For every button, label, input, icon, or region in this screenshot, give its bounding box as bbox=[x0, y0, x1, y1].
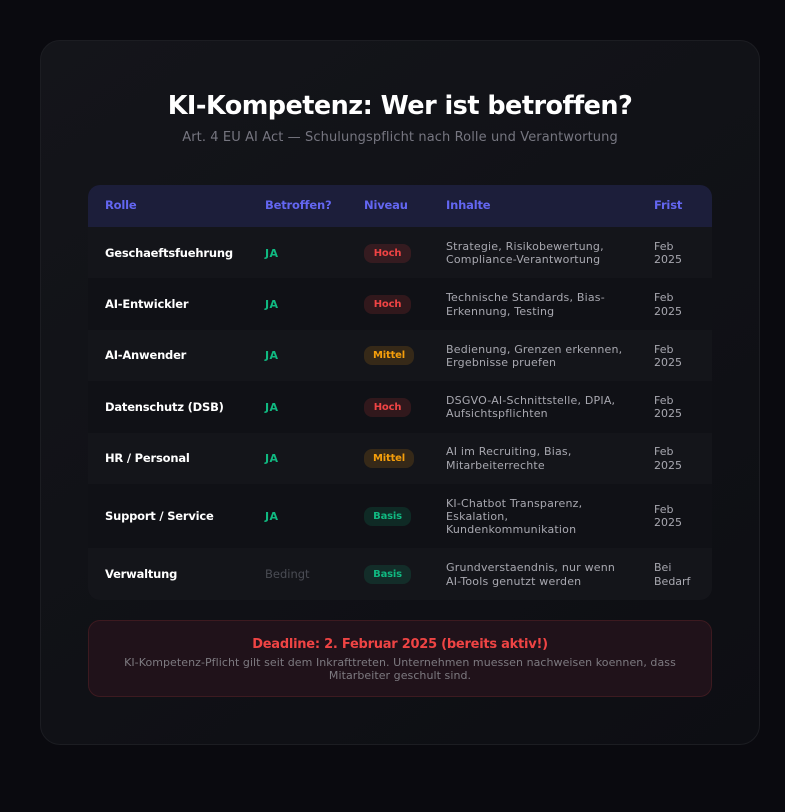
panel: table background bbox=[88, 185, 712, 600]
deadline: row 2 bbox=[654, 291, 682, 318]
role: Support / Service: Support / Service bbox=[105, 509, 214, 523]
content: row 5: Mitarbeiterrechte bbox=[446, 459, 545, 472]
title: KI-Kompetenz: Wer ist betroffen? bbox=[168, 91, 632, 121]
panel: main card bbox=[40, 40, 760, 745]
content: row 2: Technische Standards, Bias- bbox=[446, 291, 605, 304]
deadline: row 6: Feb bbox=[654, 503, 673, 516]
badge: Mittel: Mittel bbox=[373, 350, 405, 361]
affected: JA: JA bbox=[265, 401, 278, 414]
badge: Hoch bbox=[364, 398, 411, 417]
deadline: row 6: 2025 bbox=[654, 516, 682, 529]
role: AI-Anwender: AI-Anwender bbox=[105, 348, 186, 362]
row band 1 bbox=[88, 227, 712, 278]
content: row 4 bbox=[446, 394, 615, 420]
deadline: row 5: Feb bbox=[654, 445, 673, 458]
column header: Inhalte: Inhalte bbox=[446, 198, 490, 212]
deadline: row 7 bbox=[654, 561, 691, 588]
affected: JA: JA bbox=[265, 349, 278, 362]
callout text: KI-Kompetenz-Pflicht gilt seit dem Inkrafttreten. Unternehmen muessen nachweisen koennen, dass bbox=[124, 656, 676, 669]
row band 7 bbox=[88, 548, 712, 600]
content: row 5: AI im Recruiting, Bias, bbox=[446, 445, 572, 458]
deadline: row 5: 2025 bbox=[654, 459, 682, 472]
role: Geschaeftsfuehrung: Geschaeftsfuehrung bbox=[105, 246, 233, 260]
affected: JA: JA bbox=[265, 510, 278, 523]
content: row 7: AI-Tools genutzt werden bbox=[446, 575, 581, 588]
content: row 6: KI-Chatbot Transparenz, bbox=[446, 497, 582, 510]
row band 3 bbox=[88, 330, 712, 381]
deadline: row 1: 2025 bbox=[654, 253, 682, 266]
content: row 1: Compliance-Verantwortung bbox=[446, 253, 600, 266]
deadline: row 4: Feb bbox=[654, 394, 673, 407]
content: row 4: DSGVO-AI-Schnittstelle, DPIA, bbox=[446, 394, 615, 407]
affected: JA: JA bbox=[265, 247, 278, 260]
badge: Hoch bbox=[364, 295, 411, 314]
badge: Basis: Basis bbox=[373, 511, 402, 522]
row band 5 bbox=[88, 433, 712, 484]
column header: Frist: Frist bbox=[654, 198, 682, 212]
content: row 3: Ergebnisse pruefen bbox=[446, 356, 556, 369]
content: row 3 bbox=[446, 343, 622, 369]
badge: Hoch bbox=[364, 244, 411, 263]
callout heading: Deadline: 2. Februar 2025 (bereits aktiv!) bbox=[252, 637, 548, 652]
deadline: row 6 bbox=[654, 503, 682, 529]
callout: deadline bbox=[88, 620, 712, 697]
table header band bbox=[88, 185, 712, 227]
deadline: row 3 bbox=[654, 343, 682, 369]
content: row 1 bbox=[446, 240, 604, 266]
content: row 7: Grundverstaendnis, nur wenn bbox=[446, 561, 615, 574]
badge: Hoch: Hoch bbox=[374, 248, 401, 259]
column header: Rolle: Rolle bbox=[105, 198, 137, 212]
deadline: row 7: Bei bbox=[654, 561, 671, 574]
badge: Basis bbox=[364, 507, 411, 526]
content: row 5 bbox=[446, 445, 572, 472]
deadline: row 1 bbox=[654, 240, 682, 266]
content: row 1: Strategie, Risikobewertung, bbox=[446, 240, 604, 253]
content: row 7 bbox=[446, 561, 615, 588]
badge: Mittel: Mittel bbox=[373, 453, 405, 464]
badge: Basis: Basis bbox=[373, 569, 402, 580]
content: row 2: Erkennung, Testing bbox=[446, 305, 554, 318]
deadline: row 2: 2025 bbox=[654, 305, 682, 318]
callout text: Mitarbeiter geschult sind. bbox=[329, 669, 471, 682]
role: Verwaltung: Verwaltung bbox=[105, 567, 177, 581]
content: row 4: Aufsichtspflichten bbox=[446, 407, 548, 420]
deadline: row 2: Feb bbox=[654, 291, 673, 304]
content: row 6: Eskalation, bbox=[446, 510, 508, 523]
deadline: row 7: Bedarf bbox=[654, 575, 690, 588]
badge: Hoch: Hoch bbox=[374, 299, 401, 310]
content: row 6 bbox=[446, 497, 582, 536]
deadline: row 4: 2025 bbox=[654, 407, 682, 420]
deadline: row 3: Feb bbox=[654, 343, 673, 356]
column header: Niveau: Niveau bbox=[364, 198, 408, 212]
role: HR / Personal: HR / Personal bbox=[105, 451, 190, 465]
badge: Mittel bbox=[364, 449, 414, 468]
content: row 2 bbox=[446, 291, 605, 318]
deadline: row 1: Feb bbox=[654, 240, 673, 253]
deadline: row 5 bbox=[654, 445, 682, 472]
subtitle: Art. 4 EU AI Act — Schulungspflicht nach Rolle und Verantwortung bbox=[182, 130, 618, 145]
role: Datenschutz: Datenschutz (DSB) bbox=[105, 400, 224, 414]
content: row 6: Kundenkommunikation bbox=[446, 523, 576, 536]
role: AI-Entwickler: AI-Entwickler bbox=[105, 297, 188, 311]
affected: JA: JA bbox=[265, 452, 278, 465]
badge: Mittel bbox=[364, 346, 414, 365]
affected: JA: JA bbox=[265, 298, 278, 311]
deadline: row 3: 2025 bbox=[654, 356, 682, 369]
column header: Betroffen: Betroffen? bbox=[265, 198, 332, 212]
affected: Bedingt: Bedingt bbox=[265, 567, 310, 581]
badge: Basis bbox=[364, 565, 411, 584]
badge: Hoch: Hoch bbox=[374, 402, 401, 413]
content: row 3: Bedienung, Grenzen erkennen, bbox=[446, 343, 622, 356]
deadline: row 4 bbox=[654, 394, 682, 420]
callout text bbox=[124, 656, 676, 682]
